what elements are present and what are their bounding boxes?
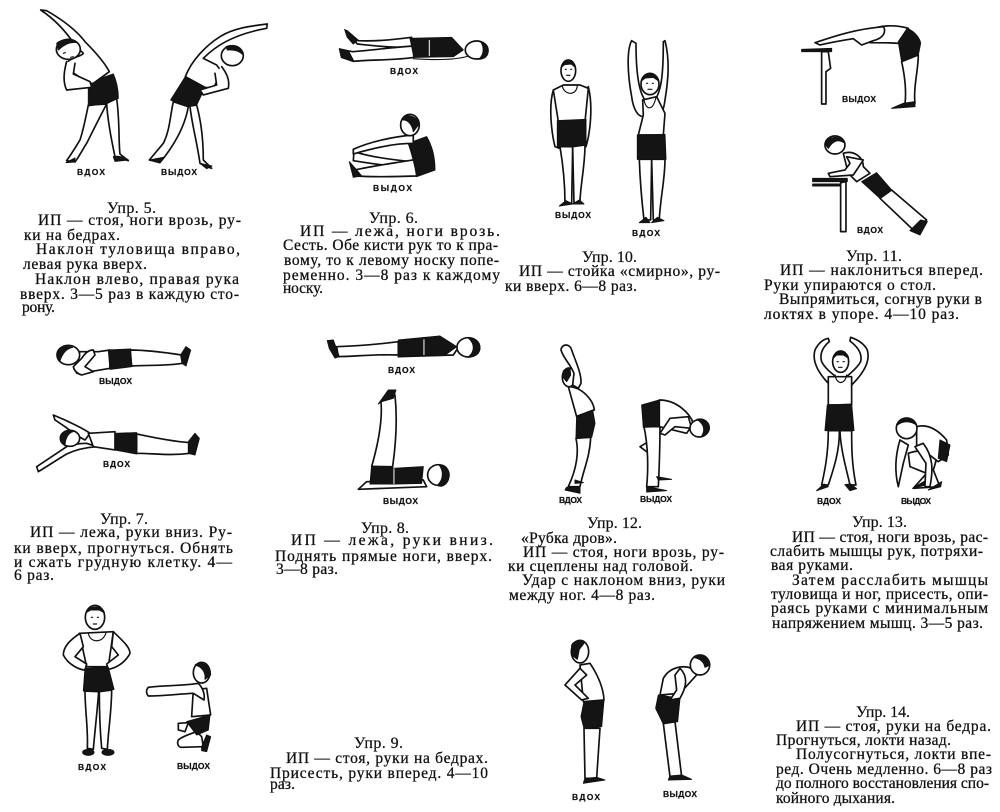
label: inhale: ВДОХ [857, 225, 883, 235]
figure: lying hugging chest, exhale [57, 345, 191, 375]
label: inhale: ВДОХ [572, 792, 600, 802]
text: exercise 5 description: левая рука вверх. [23, 256, 147, 273]
text: exercise 12 description: между ног. 4—8 раз. [509, 587, 655, 604]
text: exercise 6 description: вому, то к левому носку попе- [284, 252, 499, 269]
text: exercise 11 description: ИП — наклониться вперед. [780, 262, 983, 279]
figure: wood chopping, bent down, exhale [640, 400, 710, 492]
panel: exercise 11 [764, 26, 983, 323]
label: inhale: ВДОХ [103, 459, 130, 469]
panel: exercise 9 [63, 605, 488, 793]
text: exercise 13 description: слабить мышцы рук, потряхи- [770, 543, 983, 560]
text: exercise 11 description: локтях в упоре. 4—10 раз. [764, 306, 959, 323]
text: exercise 8 description: 3—8 раз. [276, 561, 338, 578]
panel: exercise 13 [770, 337, 989, 632]
label: inhale: ВДОХ [78, 762, 106, 772]
text: exercise 14 description [776, 704, 992, 807]
figure: arms above head, inhale [814, 337, 868, 491]
text: exercise 7 description: ИП — лежа, руки вниз. Ру- [30, 524, 232, 541]
label: exhale: ВЫДОХ [842, 94, 876, 104]
panel: exercise 7 [14, 345, 233, 584]
figure: bent forward on table, exhale [802, 26, 921, 108]
figure: squat arms forward, exhale [147, 662, 211, 752]
label: exhale: ВЫДОХ [901, 496, 931, 506]
text: exercise 9 description: ИП — стоя, руки на бедрах. [286, 750, 488, 767]
figure: wood chopping, arms overhead, inhale [561, 345, 595, 493]
label: inhale: ВДОХ [77, 167, 105, 177]
text: exercise 8 description [275, 520, 493, 578]
text: exercise 11 description: Упр. 11. [846, 248, 902, 265]
label: inhale: ВДОХ [559, 495, 582, 505]
figure: standing hands on hips, inhale [63, 605, 130, 755]
text: exercise 13 description: раясь руками с минимальным [771, 600, 988, 617]
text: exercise 11 description: Руки упираются о стол. [764, 277, 936, 294]
text: exercise 13 description: ИП — стоя, ноги врозь, рас- [792, 529, 988, 546]
text: exercise 6 description: Упр. 6. [369, 210, 418, 227]
label: exhale: ВЫДОХ [99, 376, 132, 386]
text: exercise 13 description: вая руками. [771, 557, 853, 574]
figure: bending forward, exhale [656, 655, 710, 780]
text: exercise 5 description: Наклон туловища вправо, [36, 241, 240, 258]
text: exercise 5 description: вверх. 3—5 раз в каждую сто- [20, 286, 239, 303]
text: exercise 7 description: и сжать грудную клетку. 4— [14, 554, 232, 571]
text: exercise 6 description [283, 210, 500, 297]
text: exercise 12 description: ИП — стоя, ноги врозь, ру- [523, 544, 724, 561]
label: inhale: ВДОХ [817, 496, 841, 506]
label: exhale: ВЫДОХ [640, 494, 672, 504]
figure: side bend left, exhale [149, 24, 267, 169]
text: exercise 12 description: «Рубка дров». [521, 530, 617, 547]
text: exercise 10 description [505, 249, 720, 295]
text: exercise 5 description: рону. [22, 299, 55, 316]
text: exercise 10 description: Упр. 10. [582, 249, 637, 266]
text: exercise 12 description [508, 515, 725, 604]
text: exercise 8 description: Упр. 8. [361, 520, 409, 537]
label: exhale: ВЫДОХ [555, 210, 591, 220]
text: exercise 10 description: ки вверх. 6—8 раз. [505, 278, 637, 295]
figure: side bend right, inhale [41, 10, 128, 163]
figure: standing at attention, exhale [551, 60, 591, 206]
text: exercise 6 description: Сесть. Обе кисти рук то к пра- [283, 237, 498, 254]
figure: relaxed squat, exhale [896, 418, 950, 490]
figure: arching back, inhale [565, 640, 605, 783]
text: exercise 14 description: ИП — стоя, руки на бедра. [796, 718, 991, 735]
text: exercise 7 description: 6 раз. [14, 567, 54, 584]
text: exercise 6 description: носку. [283, 280, 323, 297]
text: exercise 5 description: ИП — стоя, ноги врозь, ру- [38, 212, 241, 229]
text: exercise 8 description: Поднять прямые ноги, вверх. [275, 548, 492, 565]
text: exercise 7 description [14, 511, 233, 584]
text: exercise 10 description: ИП — стойка «смирно», ру- [519, 263, 720, 280]
figure: arms raised, inhale [628, 41, 668, 223]
panel: exercise 6 [283, 29, 500, 297]
text: exercise 11 description [764, 248, 983, 323]
text: exercise 5 description: Упр. 5. [107, 200, 156, 217]
label: exhale: ВЫДОХ [161, 167, 197, 177]
text: exercise 7 description: ки вверх, прогнуться. Обнять [14, 540, 233, 557]
text: exercise 8 description: ИП — лежа, руки вниз. [291, 532, 493, 549]
label: exhale: ВЫДОХ [663, 789, 697, 799]
text: exercise 14 description: Упр. 14. [856, 704, 910, 721]
figure: lying, inhale [339, 29, 488, 61]
text: exercise 11 description: Выпрямиться, согнув руки в [779, 291, 982, 308]
text: exercise 7 description: Упр. 7. [100, 511, 148, 528]
label: exhale: ВЫДОХ [373, 183, 412, 193]
panel: exercise 10 [505, 41, 720, 295]
text: exercise 9 description: Присесть, руки вперед. 4—10 [270, 765, 488, 782]
label: inhale: ВДОХ [388, 365, 415, 375]
text: exercise 14 description: койного дыхания. [776, 790, 895, 807]
text: exercise 12 description: Упр. 12. [587, 515, 642, 532]
label: inhale: ВДОХ [390, 66, 418, 76]
text: exercise 6 description: ременно. 3—8 раз к каждому [283, 267, 500, 284]
text: exercise 14 description: до полного восстановления спо- [776, 775, 989, 792]
panel: exercise 14 [565, 640, 992, 807]
label: exhale: ВЫДОХ [383, 496, 418, 506]
text: exercise 13 description [770, 514, 989, 632]
text: exercise 5 description: ки на бедрах. [24, 227, 120, 244]
text: exercise 13 description: напряжением мышц. 3—5 раз. [772, 615, 983, 632]
text: exercise 14 description: Полусогнуться, локти впе- [796, 746, 991, 763]
text: exercise 5 description: Наклон влево, правая рука [35, 271, 239, 288]
text: exercise 13 description: Затем расслабить мышцы [792, 572, 989, 589]
text: exercise 13 description: туловища и ног, присесть, опи- [771, 586, 988, 603]
figure: sitting, exhale [349, 114, 435, 177]
figure: push-up against table, inhale [813, 136, 927, 235]
panel: exercise 8 [275, 336, 493, 578]
text: exercise 14 description: ред. Очень медленно. 6—8 раз [776, 761, 992, 778]
figure: legs raised, exhale [358, 390, 449, 489]
panel: exercise 12 [508, 345, 725, 604]
text: exercise 12 description: Удар с наклоном вниз, руки [522, 572, 725, 589]
figure: lying flat, inhale [327, 336, 480, 358]
figure: lying arms overhead, inhale [37, 415, 199, 472]
text: exercise 13 description: Упр. 13. [852, 514, 907, 531]
label: exhale: ВЫДОХ [177, 761, 210, 771]
text: exercise 9 description [270, 735, 488, 793]
text: exercise 5 description [20, 200, 241, 316]
text: exercise 12 description: ки сцеплены над головой. [508, 558, 693, 575]
text: exercise 6 description: ИП — лежа, ноги врозь. [300, 223, 500, 240]
label: inhale: ВДОХ [632, 228, 660, 238]
text: exercise 14 description: Прогнуться, локти назад. [776, 732, 951, 749]
panel: exercise 5 [20, 10, 267, 316]
text: exercise 9 description: Упр. 9. [354, 735, 403, 752]
text: exercise 9 description: раз. [270, 776, 295, 793]
